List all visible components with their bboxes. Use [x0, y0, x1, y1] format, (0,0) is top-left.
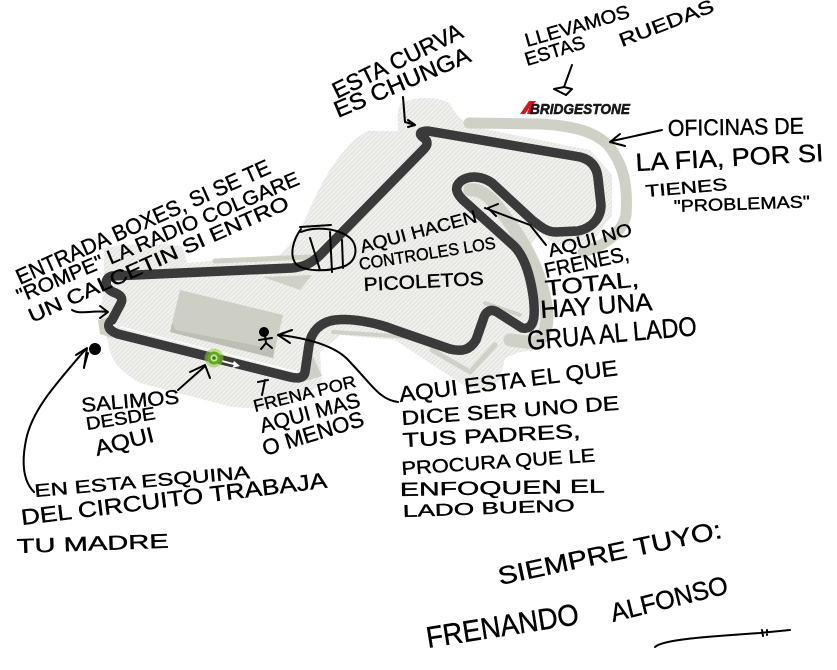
- arrow: salimos: [178, 365, 210, 390]
- note: esta curva: ES CHUNGA: [330, 41, 475, 123]
- note: esquina: [16, 462, 329, 558]
- signature underline: [655, 630, 790, 647]
- note: controles: PICOLETOS: [363, 269, 484, 296]
- signature: [424, 516, 731, 655]
- note: esta curva: ESTA CURVA: [328, 18, 467, 103]
- icon: stick figure mother: [84, 344, 100, 367]
- note: padres: [398, 355, 620, 521]
- icon: start marker: [204, 348, 224, 368]
- note: controles: AQUI HACEN: [358, 206, 479, 257]
- signature: SIEMPRE TUYO:: [495, 516, 724, 591]
- icon: stick figure parent: [259, 328, 272, 349]
- track: [106, 131, 601, 378]
- note: oficinas de la fia: TIENES: [645, 175, 728, 201]
- doodle: scribbled circle: [292, 225, 355, 272]
- arrow: boxes: [72, 306, 108, 318]
- note: esquina: DEL CIRCUITO TRABAJA: [20, 468, 329, 530]
- note: entrada boxes: "ROMPE" LA RADIO COLGARE: [13, 168, 303, 308]
- note: salimos desde aqui: SALIMOS: [81, 387, 180, 417]
- note: oficinas de la fia: "PROBLEMAS": [673, 192, 810, 216]
- bridgestone logo: BRIDGESTONE: [530, 101, 631, 118]
- note: aqui no frenes: GRUA AL LADO: [526, 311, 698, 356]
- grey run-off areas: [215, 123, 626, 372]
- note: oficinas de la fia: LA FIA, POR SI: [635, 139, 824, 177]
- note: padres: AQUI ESTA EL QUE: [398, 355, 619, 407]
- note: entrada boxes: UN CALCETIN SI ENTRO: [25, 192, 293, 328]
- arrow: bridgestone: [554, 65, 572, 95]
- note: frena por aqui: FRENA POR: [251, 372, 358, 416]
- note: entrada boxes: ENTRADA BOXES, SI SE TE: [12, 154, 274, 290]
- note: aqui no frenes: TOTAL,: [544, 266, 640, 301]
- arrow: frena: [258, 380, 268, 395]
- signature: ALFONSO: [607, 570, 731, 628]
- pit apron: [170, 323, 274, 358]
- direction arrow: [222, 360, 240, 368]
- circuit map: [98, 98, 626, 409]
- note: aqui no frenes: HAY UNA: [539, 288, 653, 324]
- note: llevamos estas ruedas: LLEVAMOS: [523, 2, 632, 52]
- note: padres: PROCURA QUE LE: [401, 446, 596, 480]
- pit lane line: [113, 325, 297, 372]
- note: aqui no frenes: AQUI NO: [546, 219, 634, 261]
- note: oficinas de la fia: [635, 113, 824, 216]
- note: frena por aqui: O MENOS: [259, 406, 367, 461]
- note: controles: CONTROLES LOS: [358, 234, 497, 274]
- note: aqui no frenes: [526, 219, 698, 356]
- arrow: curva: [403, 97, 415, 127]
- note: controles: [358, 206, 497, 296]
- note: llevamos estas ruedas: [522, 0, 717, 71]
- arrow: padres: [278, 330, 398, 402]
- signature: FRENANDO: [424, 598, 581, 655]
- note: salimos desde aqui: AQUI: [92, 422, 156, 461]
- arrow: madre: [24, 348, 87, 492]
- note: llevamos estas ruedas: RUEDAS: [616, 0, 717, 52]
- note: oficinas de la fia: OFICINAS DE: [668, 113, 804, 141]
- note: padres: ENFOQUEN EL: [400, 476, 605, 501]
- arrow: aqui no frenes: [485, 204, 546, 245]
- note: esquina: TU MADRE: [16, 531, 169, 558]
- note: padres: LADO BUENO: [402, 496, 575, 521]
- arrow: oficinas: [610, 130, 662, 146]
- note: padres: TUS PADRES,: [402, 421, 581, 452]
- note: esquina: EN ESTA ESQUINA: [34, 462, 251, 501]
- hatched infield: [100, 98, 612, 409]
- note: salimos desde aqui: DESDE: [84, 403, 157, 434]
- note: salimos desde aqui: [81, 387, 180, 461]
- note: aqui no frenes: FRENES,: [542, 243, 631, 283]
- note: frena por aqui: [251, 372, 367, 461]
- note: llevamos estas ruedas: ESTAS: [522, 33, 588, 71]
- note: padres: DICE SER UNO DE: [401, 393, 620, 430]
- pit building: [170, 290, 283, 358]
- note: frena por aqui: AQUI MAS: [257, 389, 363, 438]
